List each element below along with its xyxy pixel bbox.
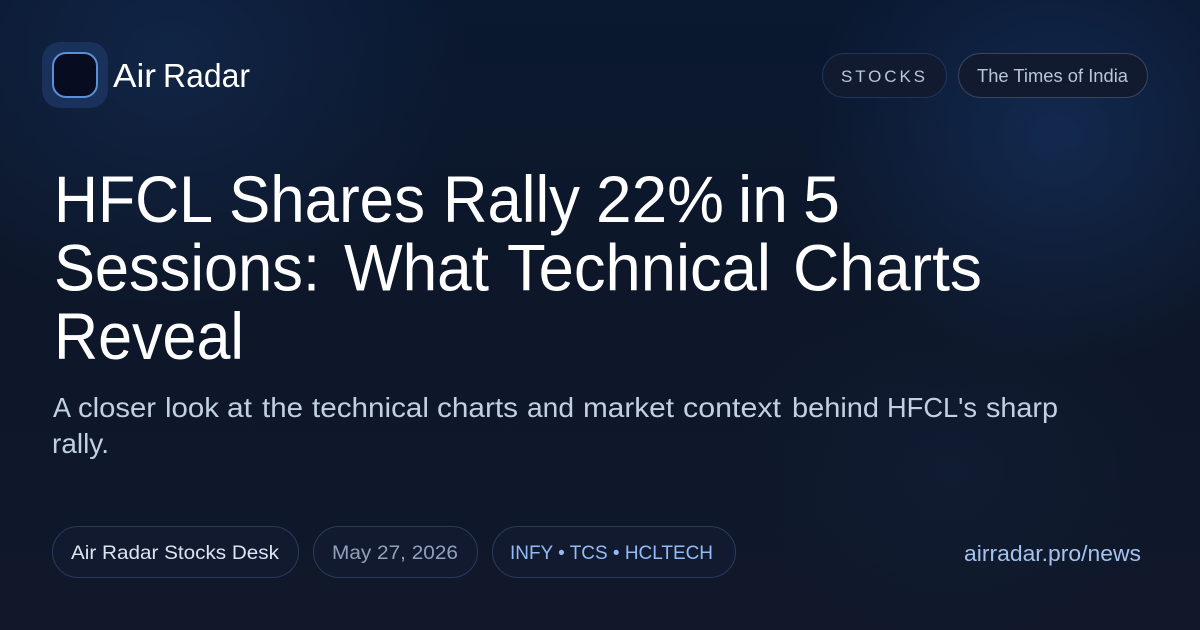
subtitle: charts — [437, 392, 518, 423]
author label: Air Radar Stocks Desk — [71, 542, 279, 564]
title: Reveal — [54, 299, 244, 373]
title: Rally — [443, 162, 580, 236]
title: Sessions: — [54, 230, 320, 304]
meta pill: date — [313, 526, 478, 578]
date label: May 27, 2026 — [332, 542, 458, 564]
tag label: STOCKS: STOCKS — [841, 67, 925, 86]
title — [54, 162, 982, 373]
logo icon — [42, 42, 108, 108]
subtitle: closer — [78, 392, 156, 423]
tag: source — [958, 53, 1148, 98]
brand name — [113, 57, 250, 94]
subtitle: and — [527, 392, 574, 423]
title: in — [738, 162, 788, 236]
subtitle: behind — [792, 392, 879, 423]
brand name: Air — [113, 57, 156, 94]
title: 5 — [803, 162, 840, 236]
title: 22% — [596, 162, 724, 236]
subtitle: sharp — [986, 392, 1058, 423]
subtitle: rally. — [52, 428, 109, 459]
meta pill: tickers — [492, 526, 736, 578]
title: What — [344, 230, 489, 304]
subtitle: context — [683, 392, 781, 423]
site url: airradar.pro/news — [964, 541, 1141, 566]
tickers label: INFY • TCS • HCLTECH — [510, 543, 713, 564]
subtitle: look — [165, 392, 220, 423]
subtitle: market — [583, 392, 674, 423]
title: Shares — [229, 162, 425, 236]
subtitle: at — [227, 392, 252, 423]
subtitle: technical — [312, 392, 429, 423]
tag: STOCKS — [822, 53, 947, 98]
meta pill: author — [52, 526, 299, 578]
title: HFCL — [54, 162, 213, 236]
subtitle: A — [53, 392, 71, 423]
title: Technical — [507, 230, 771, 304]
subtitle — [52, 392, 1058, 459]
tag label: source: The Times of India — [977, 66, 1129, 86]
brand name: Radar — [163, 57, 250, 94]
title: Charts — [793, 230, 982, 304]
subtitle: HFCL's — [887, 392, 977, 423]
subtitle: the — [262, 392, 303, 423]
